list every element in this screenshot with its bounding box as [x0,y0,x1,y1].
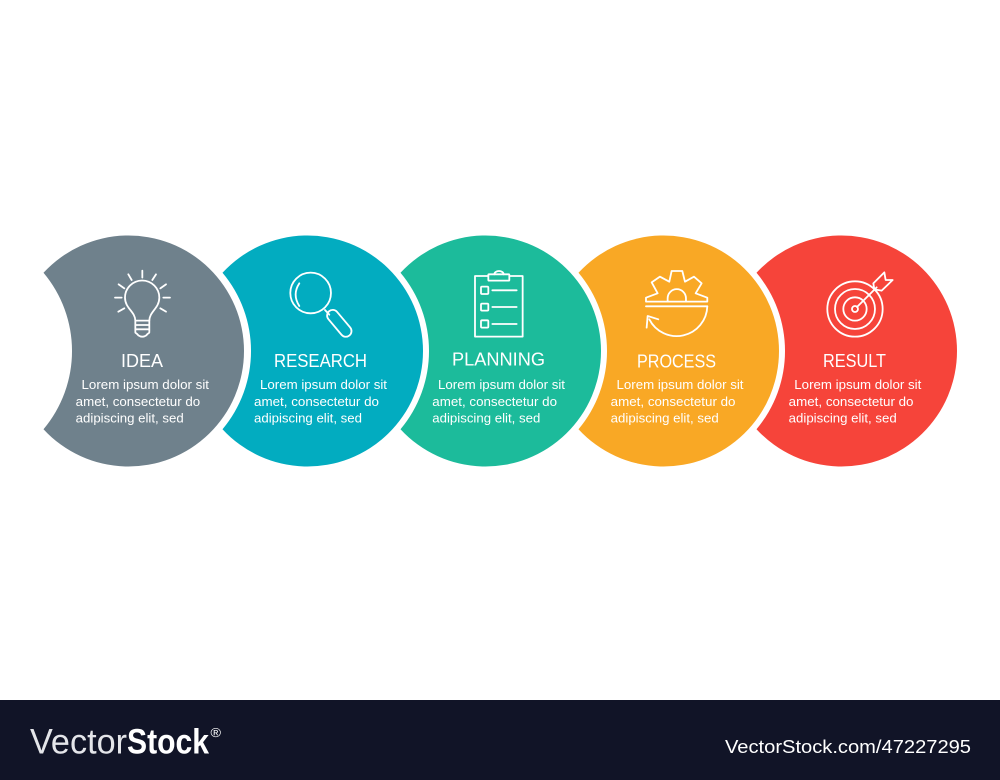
logo: VectorStock: Stock [127,722,209,762]
panel: idea [44,235,244,466]
text block: process: amet, consectetur do [611,394,736,409]
icon: target with arrow [827,272,893,337]
text block: planning [432,377,565,426]
text block: process [611,377,744,426]
text block: result [789,377,922,426]
icon: magnifying glass [290,273,354,339]
heading: research: RESEARCH [274,350,367,371]
segment shape: planning [400,235,601,466]
image id text: VectorStock.com/47227295 [725,737,971,757]
segment shape: research [222,235,423,466]
text block: idea: Lorem ipsum dolor sit [82,377,209,392]
panel: result [756,235,957,466]
text block: process: Lorem ipsum dolor sit [616,377,744,392]
heading: result: RESULT [823,350,886,371]
text block: result: adipiscing elit, sed [789,411,897,426]
logo: VectorStock: ® [210,725,221,740]
text block: research: adipiscing elit, sed [254,411,362,426]
segment shape: idea [44,235,244,466]
text block: idea [76,377,209,426]
panel: process [578,235,779,466]
text block: research: amet, consectetur do [254,394,379,409]
text block: research: Lorem ipsum dolor sit [260,377,387,392]
text block: result: Lorem ipsum dolor sit [794,377,922,392]
logo: VectorStock: Vector [30,722,127,762]
panel: research [222,235,423,466]
text block: idea: adipiscing elit, sed [76,411,184,426]
panel: planning [400,235,601,466]
segment shape: result [756,235,957,466]
segment shape: process [578,235,779,466]
text block: result: amet, consectetur do [789,394,914,409]
text block: idea: amet, consectetur do [76,394,200,409]
icon: light bulb [115,271,170,337]
text block: planning: Lorem ipsum dolor sit [438,377,565,392]
heading: planning: PLANNING [452,349,545,370]
heading: process: PROCESS [637,350,716,372]
icon: clipboard checklist [475,271,523,337]
text block: process: adipiscing elit, sed [611,411,719,426]
footer background [0,700,1000,780]
footer bar [0,700,1000,780]
logo: VectorStock [30,722,221,762]
icon: gear with cycle arrow [646,271,707,336]
text block: planning: amet, consectetur do [432,394,557,409]
text block: planning: adipiscing elit, sed [432,411,540,426]
text block: research [254,377,387,426]
heading: idea: IDEA [121,350,164,371]
